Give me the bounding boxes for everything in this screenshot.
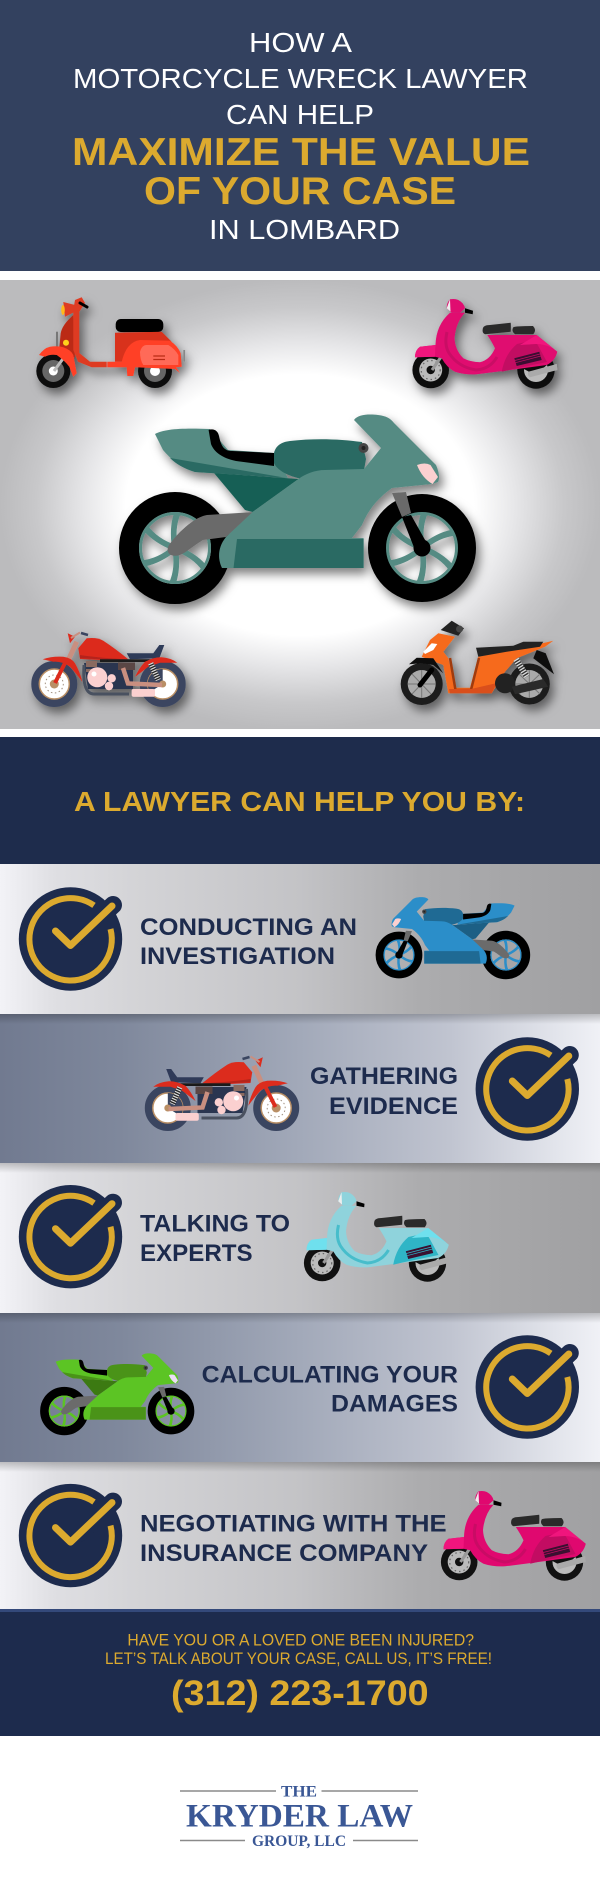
panel: negotiating with the insurance company — [0, 1462, 600, 1612]
logo: THE — [281, 1784, 317, 1801]
logo: GROUP, LLC — [252, 1833, 346, 1850]
icon: green sport motorcycle — [129, 415, 466, 594]
icon: pink scooter — [441, 1491, 586, 1581]
text: NEGOTIATING WITH THE — [140, 1511, 447, 1538]
text — [140, 1211, 290, 1267]
icon: checkmark — [19, 1185, 122, 1288]
title: HOW A — [249, 27, 352, 58]
title: IN LOMBARD — [209, 214, 400, 245]
icon: checkmark — [19, 1484, 122, 1587]
icon: checkmark — [476, 1037, 579, 1141]
text: GATHERING — [310, 1063, 458, 1090]
text: EVIDENCE — [329, 1093, 458, 1120]
panel: header — [0, 0, 600, 271]
phone number: (312) 223-1700 — [171, 1674, 429, 1713]
text: CONDUCTING AN — [140, 914, 357, 941]
icon: green sport motorcycle — [44, 1353, 190, 1431]
panel: section heading — [0, 737, 600, 864]
text — [140, 914, 357, 970]
icon: checkmark — [476, 1335, 579, 1439]
text — [140, 1511, 447, 1567]
text: TALKING TO — [140, 1211, 290, 1238]
panel: calculating your damages — [0, 1313, 600, 1462]
panel: call to action — [0, 1612, 600, 1736]
panel: motorcycles hero — [0, 280, 600, 729]
icon: orange scooter — [401, 621, 554, 705]
text: INVESTIGATION — [140, 943, 335, 970]
panel: conducting an investigation — [0, 864, 600, 1014]
title — [72, 27, 530, 245]
text: INSURANCE COMPANY — [140, 1540, 428, 1567]
icon: red retro motorcycle — [35, 632, 182, 703]
text — [202, 1362, 458, 1418]
title: MOTORCYCLE WRECK LAWYER — [73, 63, 528, 94]
heading: A LAWYER CAN HELP YOU BY: — [74, 786, 525, 817]
title: CAN HELP — [226, 99, 374, 130]
panel: gathering evidence — [0, 1014, 600, 1163]
icon: red scooter — [36, 297, 185, 388]
call to action text — [105, 1631, 492, 1668]
text: DAMAGES — [331, 1391, 458, 1418]
panel: talking to experts — [0, 1163, 600, 1313]
icon: teal scooter — [304, 1192, 449, 1282]
title: OF YOUR CASE — [144, 170, 456, 213]
text — [310, 1063, 458, 1120]
icon: blue sport motorcycle — [380, 897, 526, 975]
logo: KRYDER LAW — [186, 1799, 413, 1835]
icon: red retro motorcycle — [149, 1056, 295, 1127]
logo — [180, 1784, 418, 1850]
title: MAXIMIZE THE VALUE — [72, 131, 530, 174]
call to action text: HAVE YOU OR A LOVED ONE BEEN INJURED? — [127, 1631, 474, 1650]
icon: magenta scooter — [412, 299, 557, 389]
text: CALCULATING YOUR — [202, 1362, 458, 1389]
icon: checkmark — [19, 887, 122, 991]
call to action text: LET’S TALK ABOUT YOUR CASE, CALL US, IT’S FREE! — [105, 1649, 492, 1668]
text: EXPERTS — [140, 1240, 253, 1267]
